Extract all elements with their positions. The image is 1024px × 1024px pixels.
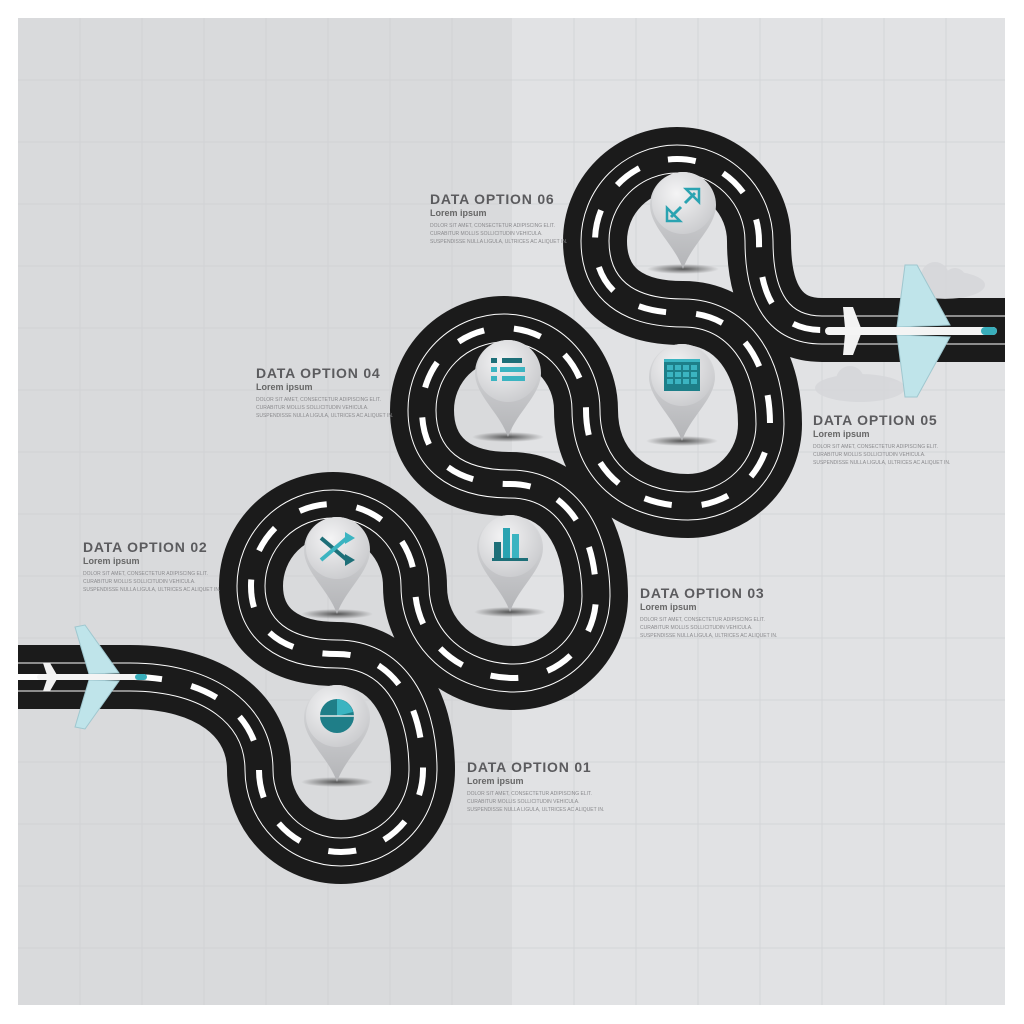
text: option 03: Lorem ipsum [640, 602, 697, 612]
text: option 04: SUSPENDISSE NULLA LIGULA, ULTRICES AC ALIQUET IN. [256, 413, 393, 419]
text: option 01: Lorem ipsum [467, 776, 524, 786]
text: option 01: DATA OPTION 01 [467, 759, 592, 775]
text: option 02: Lorem ipsum [83, 556, 140, 566]
text: option 06: DATA OPTION 06 [430, 191, 555, 207]
text: option 04: Lorem ipsum [256, 382, 313, 392]
text: option 02: CURABITUR MOLLIS SOLLICITUDIN VEHICULA. [83, 579, 196, 585]
text: option 02: DATA OPTION 02 [83, 539, 208, 555]
text: option 02: SUSPENDISSE NULLA LIGULA, ULTRICES AC ALIQUET IN. [83, 587, 220, 593]
text: option 05: DOLOR SIT AMET, CONSECTETUR ADIPISCING ELIT. [813, 444, 938, 450]
clouds [815, 262, 985, 402]
plane: left [37, 625, 147, 729]
text: option 01: SUSPENDISSE NULLA LIGULA, ULTRICES AC ALIQUET IN. [467, 807, 604, 813]
text: option 06: CURABITUR MOLLIS SOLLICITUDIN VEHICULA. [430, 231, 543, 237]
pin 3: bar chart [474, 515, 546, 617]
text: option 02 [83, 539, 220, 593]
text: option 02: DOLOR SIT AMET, CONSECTETUR ADIPISCING ELIT. [83, 571, 208, 577]
text: option 04 [256, 365, 393, 419]
text: option 05: DATA OPTION 05 [813, 412, 938, 428]
text: option 06 [430, 191, 567, 245]
text: option 05 [813, 412, 950, 466]
text: option 04: DATA OPTION 04 [256, 365, 381, 381]
text: option 03: CURABITUR MOLLIS SOLLICITUDIN VEHICULA. [640, 625, 753, 631]
text: option 01 [467, 759, 604, 813]
text: option 01: DOLOR SIT AMET, CONSECTETUR ADIPISCING ELIT. [467, 791, 592, 797]
pin 4: list [472, 340, 544, 442]
text: option 05: CURABITUR MOLLIS SOLLICITUDIN VEHICULA. [813, 452, 926, 458]
text: option 03: SUSPENDISSE NULLA LIGULA, ULTRICES AC ALIQUET IN. [640, 633, 777, 639]
pin 6: diagonal arrows [647, 172, 719, 274]
text: option 05: Lorem ipsum [813, 429, 870, 439]
text: option 06: SUSPENDISSE NULLA LIGULA, ULTRICES AC ALIQUET IN. [430, 239, 567, 245]
text: option 04: CURABITUR MOLLIS SOLLICITUDIN VEHICULA. [256, 405, 369, 411]
text: option 03 [640, 585, 777, 639]
plane: right [825, 265, 997, 397]
pin 1: pie chart [301, 685, 373, 787]
pin 2: shuffle [301, 517, 373, 619]
text: option 06: DOLOR SIT AMET, CONSECTETUR ADIPISCING ELIT. [430, 223, 555, 229]
pin 5: calendar [646, 344, 718, 446]
text: option 03: DATA OPTION 03 [640, 585, 765, 601]
text: option 03: DOLOR SIT AMET, CONSECTETUR ADIPISCING ELIT. [640, 617, 765, 623]
text: option 05: SUSPENDISSE NULLA LIGULA, ULTRICES AC ALIQUET IN. [813, 460, 950, 466]
text: option 06: Lorem ipsum [430, 208, 487, 218]
road [18, 159, 1005, 852]
text: option 01: CURABITUR MOLLIS SOLLICITUDIN VEHICULA. [467, 799, 580, 805]
text: option 04: DOLOR SIT AMET, CONSECTETUR ADIPISCING ELIT. [256, 397, 381, 403]
